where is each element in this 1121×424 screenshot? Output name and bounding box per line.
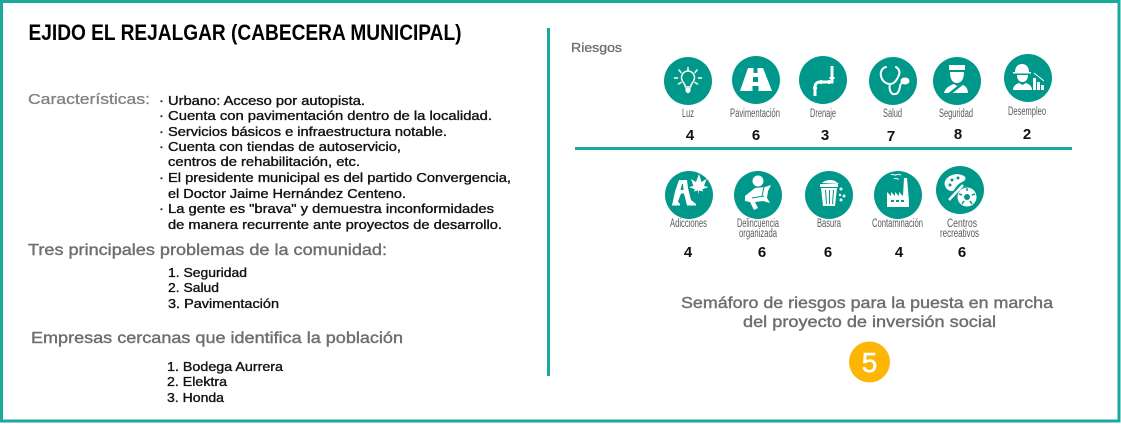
semáforo heading (681, 295, 1053, 331)
risk: Seguridad: Seguridad (939, 108, 973, 120)
risk: Adicciones: 4 (684, 244, 693, 261)
risk: Drenaje (799, 56, 847, 144)
list: características: el Doctor Jaime Hernández Centeno. (168, 186, 406, 201)
risk: Contaminación: Contaminación (872, 218, 923, 230)
risk: Drenaje: 3 (821, 127, 829, 144)
list: características: de manera recurrente ante proyectos de desarrollo. (168, 217, 502, 232)
list: problemas (168, 265, 279, 311)
heading: características: Características: (28, 91, 150, 108)
semáforo badge (849, 342, 890, 382)
list: características (159, 93, 511, 232)
risk: Desempleo: 2 (1023, 126, 1031, 143)
risk: Delincuencia organizada (734, 171, 782, 261)
risk: Salud: 7 (887, 128, 895, 145)
panel: left text column (28, 91, 511, 405)
list: problemas: 3. Pavimentación (168, 296, 279, 311)
list: características: · Cuenta con tiendas de autoservicio, (159, 139, 401, 154)
risk: Contaminación (872, 171, 923, 261)
risk: Delincuencia organizada: 6 (758, 244, 766, 261)
risk: Seguridad (933, 57, 981, 143)
list: características: · La gente es "brava" y demuestra inconformidades (159, 201, 495, 216)
risk: Contaminación: 4 (895, 244, 904, 261)
risk: Drenaje: Drenaje (810, 108, 836, 120)
risk: Basura: Basura (817, 218, 841, 230)
list: características: · El presidente municipal es del partido Convergencia, (159, 170, 511, 185)
horizontal divider (575, 147, 1072, 150)
list: características: · Cuenta con pavimentación dentro de la localidad. (159, 108, 492, 123)
risk: Desempleo: Desempleo (1008, 106, 1046, 118)
risk: Luz (664, 57, 712, 144)
risk: Pavimentación: Pavimentación (730, 108, 780, 120)
risk: Pavimentación (730, 56, 780, 144)
risk: Salud (869, 57, 917, 145)
list: problemas: 2. Salud (168, 280, 219, 295)
risk: Centros recreativos: 6 (958, 244, 966, 261)
risk: Salud: Salud (883, 108, 902, 120)
list: empresas: 2. Elektra (167, 374, 228, 389)
risk: Centros recreativos: Centros (947, 218, 977, 230)
list: características: centros de rehabilitación, etc. (168, 154, 360, 169)
risk: Desempleo (1004, 54, 1052, 143)
risk: Seguridad: 8 (954, 126, 962, 143)
heading: tres principales problemas: Tres principales problemas de la comunidad: (28, 242, 387, 259)
list: empresas: 1. Bodega Aurrera (167, 359, 284, 374)
list: empresas (167, 359, 284, 405)
semáforo heading: del proyecto de inversión social (743, 314, 996, 331)
semáforo heading: Semáforo de riesgos para la puesta en marcha (681, 295, 1053, 312)
title: EJIDO EL REJALGAR (CABECERA MUNICIPAL) (28, 20, 462, 45)
risk: Delincuencia organizada: organizada (739, 228, 777, 240)
risk: Adicciones (665, 171, 713, 261)
risk: Luz: Luz (682, 108, 694, 120)
heading: empresas cercanas: Empresas cercanas que identifica la población (31, 330, 403, 347)
risk: Adicciones: Adicciones (670, 218, 707, 230)
risk: Luz: 4 (686, 127, 695, 144)
risk: Basura (805, 171, 853, 261)
semáforo badge: 5 (862, 347, 877, 378)
risk: Pavimentación: 6 (752, 127, 760, 144)
list: características: · Servicios básicos e infraestructura notable. (159, 124, 447, 139)
risk: Centros recreativos: recreativos (940, 228, 979, 240)
risk: Basura: 6 (824, 244, 832, 261)
risk: Delincuencia organizada: Delincuencia (737, 218, 779, 230)
heading: riesgos: Riesgos (571, 41, 622, 55)
risk: Centros recreativos (936, 166, 984, 261)
vertical divider (547, 28, 550, 376)
list: empresas: 3. Honda (167, 390, 225, 405)
list: características: · Urbano: Acceso por autopista. (159, 93, 365, 108)
list: problemas: 1. Seguridad (168, 265, 247, 280)
